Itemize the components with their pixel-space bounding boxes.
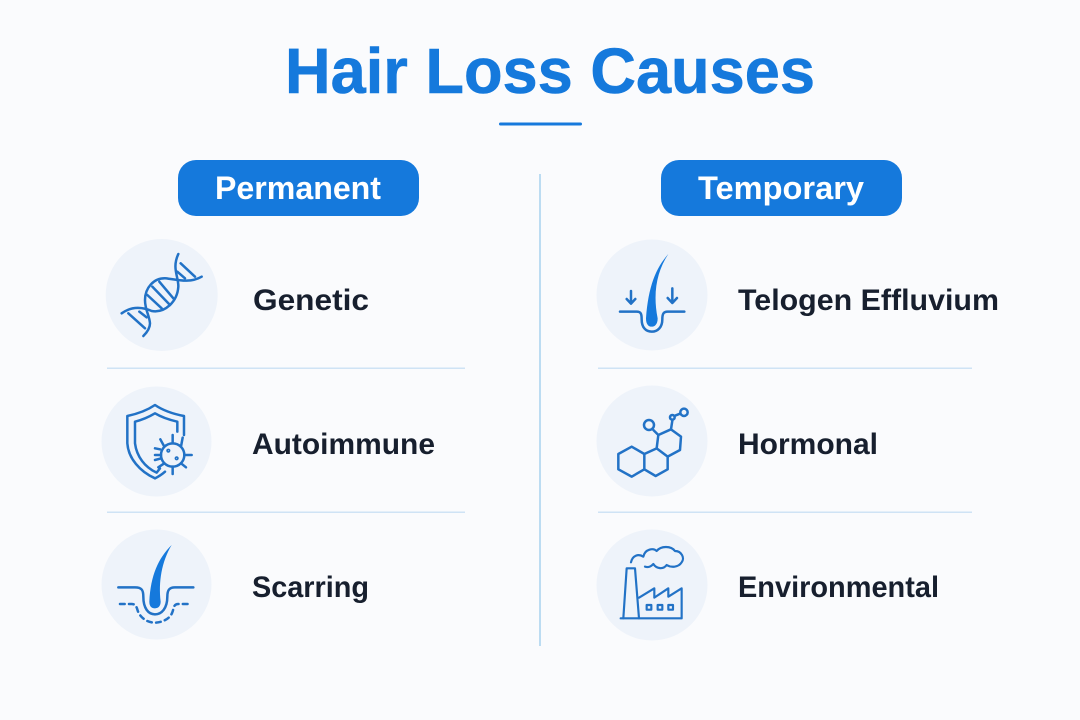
label: Genetic — [253, 284, 369, 317]
item: Genetic — [106, 239, 369, 351]
heading: Permanent — [178, 160, 419, 216]
panel: permanent — [102, 160, 435, 640]
divider — [107, 368, 465, 369]
item: Autoimmune — [102, 386, 435, 496]
heading: Temporary: Temporary — [698, 170, 864, 206]
icon: factory — [621, 547, 683, 618]
item: Scarring — [102, 530, 369, 640]
panel: temporary — [596, 160, 999, 640]
item: Hormonal — [596, 386, 878, 496]
divider — [598, 368, 972, 369]
label: Hormonal — [738, 428, 878, 461]
label: Environmental — [738, 571, 939, 604]
icon: DNA helix — [122, 254, 202, 336]
center divider — [539, 174, 541, 646]
icon: hair follicle with arrows — [620, 254, 684, 332]
icon: shield with virus — [127, 405, 192, 478]
heading: Temporary — [661, 160, 902, 216]
title: Hair Loss Causes — [285, 35, 815, 107]
heading: Permanent: Permanent — [215, 170, 381, 206]
item: Telogen Effluvium — [596, 240, 999, 350]
icon: molecule — [618, 409, 688, 477]
item: Environmental — [596, 530, 939, 640]
label: Autoimmune — [252, 428, 435, 461]
icon: scarred hair follicle — [118, 545, 193, 623]
label: Telogen Effluvium — [738, 284, 999, 317]
label: Scarring — [252, 571, 369, 604]
